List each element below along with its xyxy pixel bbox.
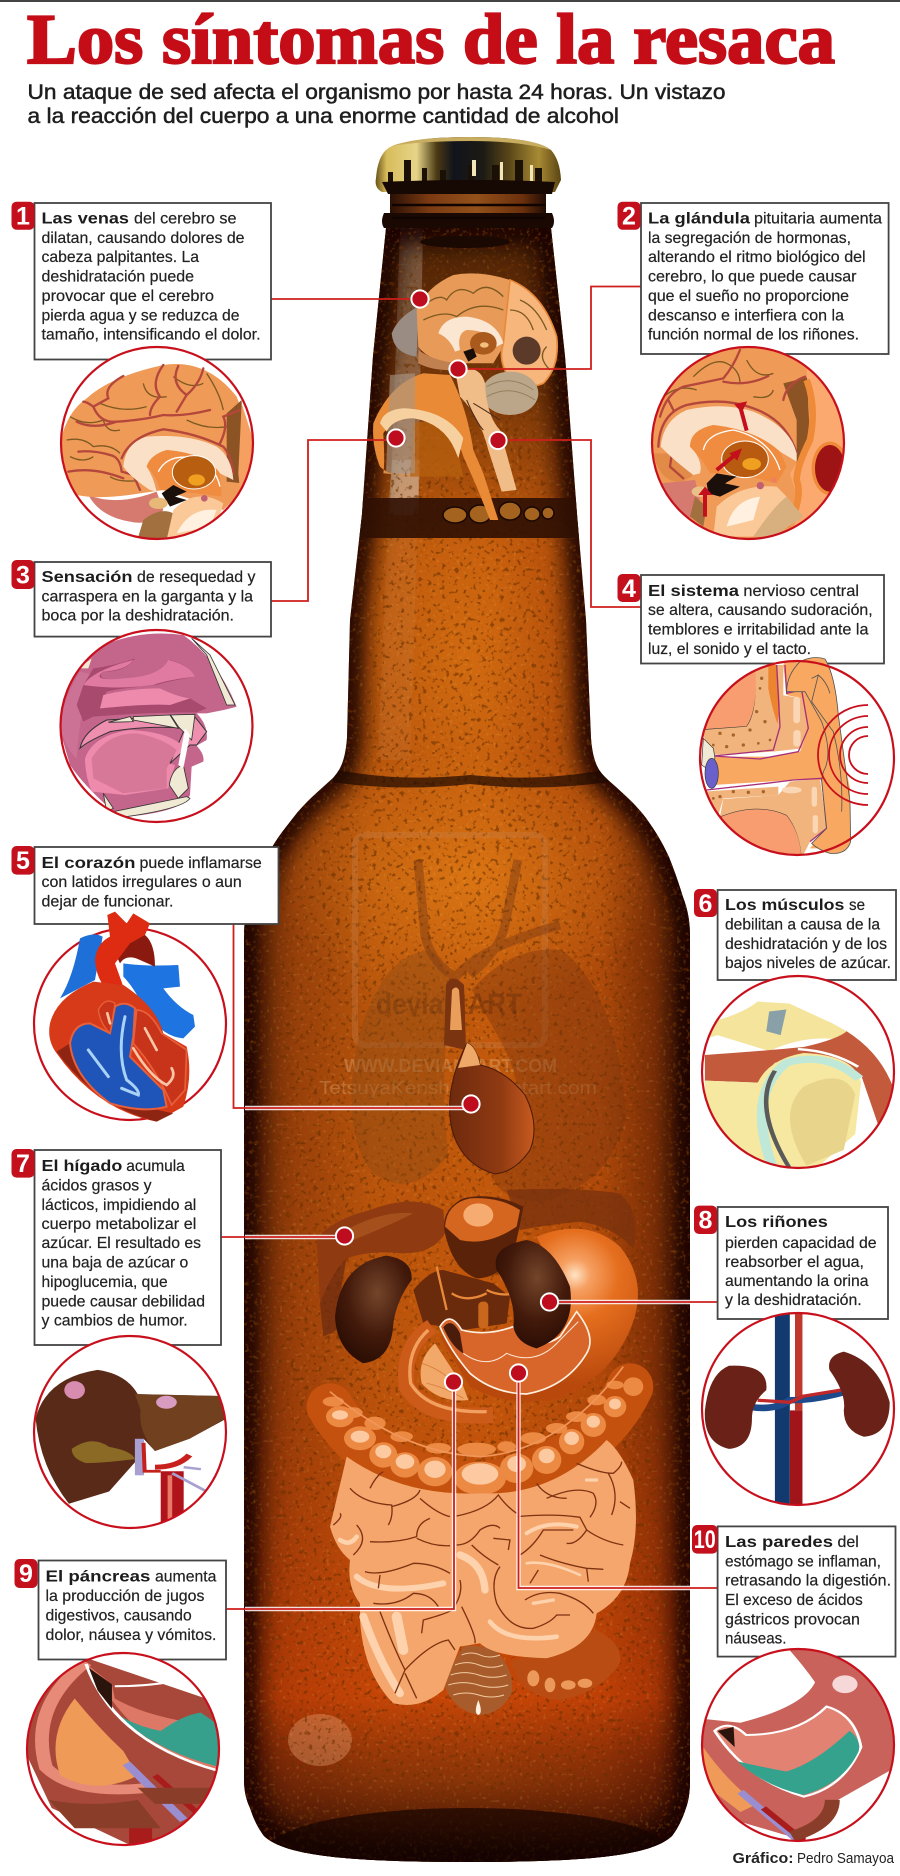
text box 10: El exceso de ácidos xyxy=(725,1592,863,1609)
pancreas xyxy=(421,1343,468,1400)
text box 1: del cerebro se xyxy=(134,210,237,227)
text box 10: Las paredes xyxy=(725,1534,833,1551)
spleen and diaphragm shade xyxy=(507,1189,636,1248)
text box 9 xyxy=(14,1559,226,1660)
text box 8: reabsorber el agua, xyxy=(725,1254,864,1271)
liver xyxy=(317,1202,445,1303)
credit: Gráfico: xyxy=(732,1851,794,1867)
text box 10: retrasando la digestión. xyxy=(725,1573,891,1590)
callout line 3 xyxy=(271,440,395,601)
text box 2: La glándula xyxy=(648,210,750,227)
text box 2 xyxy=(618,202,889,354)
text box 4: 4 xyxy=(622,575,636,603)
text box 1: deshidratación puede xyxy=(42,268,194,286)
brain stem xyxy=(455,368,517,492)
text box 4: se altera, causando sudoración, xyxy=(648,602,873,619)
throat xyxy=(373,373,498,520)
text box 6: Los músculos xyxy=(725,897,845,914)
callout line 8 xyxy=(550,1300,718,1304)
text box 9: la producción de jugos xyxy=(46,1588,204,1605)
stomach xyxy=(440,1229,638,1401)
text box 5: 5 xyxy=(16,847,30,875)
duodenum xyxy=(406,1327,493,1416)
text box 5: El corazón xyxy=(42,855,136,872)
marker dots xyxy=(336,290,558,1391)
circle 10: stomach xyxy=(701,1649,895,1841)
text box 8: pierden capacidad de xyxy=(725,1235,877,1252)
brain rear xyxy=(501,280,557,387)
text box 2: función normal de los riñones. xyxy=(648,326,859,343)
text box 7: El hígado xyxy=(42,1158,123,1175)
subtitle: a la reacción del cuerpo a una enorme cantidad de alcohol xyxy=(28,105,619,128)
kidneys xyxy=(335,1256,412,1363)
text box 7: y cambios de humor. xyxy=(42,1313,188,1330)
text box 4: temblores e irritabilidad ante la xyxy=(648,622,869,639)
circle 3: mouth and throat xyxy=(58,630,252,822)
stomach inner xyxy=(440,1312,590,1394)
callout line 10 xyxy=(518,1373,718,1588)
text box 7: una baja de azúcar o xyxy=(42,1255,188,1272)
text box 3: boca por la deshidratación. xyxy=(42,608,234,625)
text box 6: se xyxy=(849,897,865,914)
text box 3 xyxy=(12,560,271,637)
text box 5 xyxy=(12,846,278,924)
text box 4: luz, el sonido y el tacto. xyxy=(648,641,811,658)
text box 7: 7 xyxy=(16,1150,30,1178)
bottle cap xyxy=(376,137,561,194)
text box 3: 3 xyxy=(16,562,30,590)
circle 1: brain veins xyxy=(60,347,253,540)
intestine highlights xyxy=(340,1480,597,1693)
text box 10 xyxy=(692,1525,896,1657)
text box 6: 6 xyxy=(699,890,712,918)
text box 7: cuerpo metabolizar el xyxy=(42,1216,196,1233)
cerebellum xyxy=(482,372,538,415)
text box 10: náuseas. xyxy=(725,1631,786,1648)
text box 6: bajos niveles de azúcar. xyxy=(725,955,891,972)
text box 1: provocar que el cerebro xyxy=(42,288,214,305)
circle 2: pituitary gland xyxy=(650,347,850,543)
text box 3: carraspera en la garganta y la xyxy=(42,588,253,605)
circle 8: kidneys xyxy=(702,1309,894,1508)
watermark: WWW.DEVIANTART.COM xyxy=(344,1056,557,1076)
text box 8: y la deshidratación. xyxy=(725,1292,862,1309)
text box 10: gástricos provocan xyxy=(725,1612,860,1629)
brain front grey part xyxy=(392,307,418,357)
watermark xyxy=(319,835,597,1098)
text box 10: estómago se inflaman, xyxy=(725,1554,881,1571)
text box 4: nervioso central xyxy=(743,583,859,600)
watermark: deviantART xyxy=(376,988,522,1021)
text box 5: con latidos irregulares o aun xyxy=(42,874,242,891)
text box 8: aumentando la orina xyxy=(725,1273,869,1290)
text box 2: la segregación de hormonas, xyxy=(648,230,851,247)
callout line 9 xyxy=(226,1382,454,1609)
vessels xyxy=(413,1270,510,1330)
text box 5: puede inflamarse xyxy=(140,855,262,872)
text box 6: debilitan a causa de la xyxy=(725,917,880,934)
title: Los síntomas de la resaca xyxy=(27,1,835,79)
text box 7: puede causar debilidad xyxy=(42,1294,205,1310)
dark blob under ring xyxy=(420,236,510,248)
text box 1: cabeza palpitantes. La xyxy=(42,249,199,266)
text box 1: 1 xyxy=(16,202,30,230)
text box 7: ácidos grasos y xyxy=(42,1178,152,1195)
rectum xyxy=(445,1646,512,1715)
lower right loops xyxy=(510,1630,620,1700)
text box 10: del xyxy=(838,1534,859,1551)
callout line 5 xyxy=(234,924,471,1108)
text box 3: Sensación xyxy=(42,569,132,586)
text box 5: dejar de funcionar. xyxy=(42,894,173,911)
brain main xyxy=(417,273,510,363)
circle 9: pancreas xyxy=(23,1653,230,1849)
credit: Pedro Samayoa xyxy=(797,1851,895,1867)
credit xyxy=(732,1851,895,1867)
main mass xyxy=(330,1440,636,1705)
colon xyxy=(330,1387,630,1485)
beer bottle xyxy=(240,137,695,1876)
text box 4: El sistema xyxy=(648,583,739,600)
text box 9: digestivos, causando xyxy=(46,1608,192,1624)
callout line 1 xyxy=(271,298,420,300)
text box 1: dilatan, causando dolores de xyxy=(42,230,245,247)
text box 6 xyxy=(694,889,896,980)
intestine folds xyxy=(333,1462,630,1698)
text box 9: El páncreas xyxy=(46,1569,151,1586)
bottle glass xyxy=(240,220,695,1876)
text box 4 xyxy=(618,574,884,664)
text box 1 xyxy=(12,202,271,360)
circle 4: ear xyxy=(697,657,894,862)
text box 7 xyxy=(12,1149,221,1345)
text box 3: de resequedad y xyxy=(137,569,256,586)
text box 7: acumula xyxy=(126,1158,185,1175)
circle 5: heart xyxy=(34,912,226,1122)
second neck ring xyxy=(390,190,546,213)
text box 7: hipoglucemia, que xyxy=(42,1274,168,1291)
text box 1: Las venas xyxy=(42,210,129,227)
text box 8: Los riñones xyxy=(725,1214,828,1231)
organ: brain, neck and throat xyxy=(373,273,557,520)
text box 9: dolor, náusea y vómitos. xyxy=(46,1627,216,1644)
subtitle: Un ataque de sed afecta el organismo por hasta 24 horas. Un vistazo xyxy=(28,81,726,104)
callout line 2 xyxy=(458,286,641,369)
subtitle xyxy=(28,81,726,128)
text box 9: aumenta xyxy=(155,1569,217,1586)
text box 10: 10 xyxy=(694,1526,716,1554)
organ: heart xyxy=(450,1043,534,1174)
callout line 7 xyxy=(221,1235,344,1239)
text box 2: alterando el ritmo biológico del xyxy=(648,249,866,266)
ear shell xyxy=(787,657,851,853)
text box 9: 9 xyxy=(19,1560,33,1588)
organ: lungs and vessels xyxy=(352,860,626,1202)
shoulder band xyxy=(332,770,608,788)
text box 2: descanso e interfiera con la xyxy=(648,307,844,324)
text box 8: 8 xyxy=(699,1206,713,1234)
text box 1: tamaño, intensificando el dolor. xyxy=(42,326,260,343)
circle 6: shoulder muscle xyxy=(702,976,895,1170)
text box 8 xyxy=(694,1206,888,1319)
text box 7: lácticos, impidiendo al xyxy=(42,1197,196,1214)
text box 1: pierda agua y se reduzca de xyxy=(42,307,240,324)
foam band xyxy=(350,498,590,538)
text box 2: pituitaria aumenta xyxy=(754,210,882,227)
text box 6: deshidratación y de los xyxy=(725,936,887,953)
text box 2: 2 xyxy=(622,202,636,230)
circle 7: liver xyxy=(34,1336,227,1530)
central liver lobe xyxy=(444,1196,523,1278)
organ: intestines xyxy=(330,1440,636,1715)
text box 2: cerebro, lo que puede causar xyxy=(648,268,857,286)
organ: abdomen upper xyxy=(317,1189,643,1495)
text box 7: azúcar. El resultado es xyxy=(42,1235,201,1252)
watermark: TetsuyaKenshi.deviantart.com xyxy=(319,1078,597,1098)
callout line 4 xyxy=(498,440,641,607)
text box 2: que el sueño no proporcione xyxy=(648,288,849,305)
